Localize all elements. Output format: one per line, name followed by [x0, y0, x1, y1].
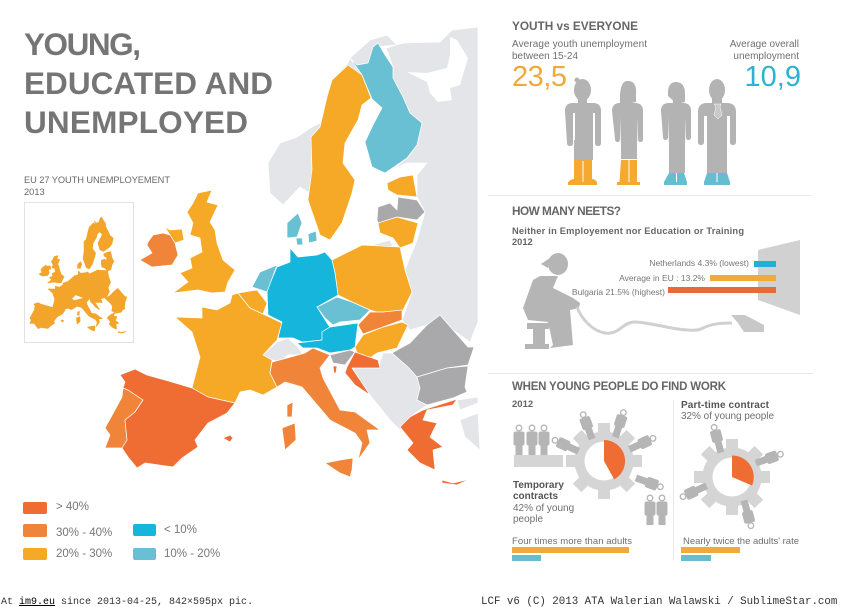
- figure: woman: [661, 82, 691, 185]
- youth stat: [512, 39, 647, 93]
- text: part-time contract: [681, 400, 774, 422]
- panel: when young people do find work: [512, 381, 799, 561]
- overall stat: [730, 39, 801, 93]
- legend: < 10%: [164, 524, 197, 536]
- text: temporary contracts: contracts: [513, 491, 558, 502]
- subtitle: EU 27 youth unemployment: EU 27 YOUTH UNEMPLOYEMENT: [24, 175, 170, 185]
- non-EU countries background: [263, 27, 480, 450]
- inset map: EU 27 overall: [24, 202, 134, 342]
- bars: four times more than adults: [512, 536, 632, 561]
- title: UNEMPLOYED: [24, 104, 248, 140]
- countries: 10-20 percent: [252, 43, 422, 325]
- legend: [23, 501, 220, 560]
- youth stat: 23,5: [512, 61, 567, 93]
- footer: image host caption: [1, 596, 837, 607]
- main map of Europe: [105, 27, 480, 485]
- legend: > 40%: [56, 501, 89, 513]
- projection screen: [758, 240, 800, 315]
- people on gear: part-time: [678, 423, 785, 530]
- title: YOUNG,: [24, 26, 141, 62]
- legend: 30% - 40%: [56, 527, 112, 539]
- bars: nearly twice the adults' rate: Nearly twice the adults' rate: [683, 536, 799, 547]
- figure: young man: [565, 78, 601, 185]
- text: temporary contracts: people: [513, 514, 543, 525]
- youth stat: between 15-24: [512, 51, 578, 62]
- bars: four times more than adults: Four times more than adults: [512, 536, 632, 547]
- heading: WHEN YOUNG PEOPLE DO FIND WORK: [512, 381, 727, 393]
- text: temporary contracts: 42% of young: [513, 503, 574, 514]
- bar chart: NEET rates: Netherlands 4.3% (lowest): [649, 258, 749, 268]
- overall stat: Average overall: [730, 39, 799, 50]
- overall stat: unemployment: [733, 51, 799, 62]
- legend: 10% - 20%: [164, 548, 220, 560]
- title: [24, 26, 273, 140]
- gear chart: temporary contracts 42 percent: [566, 423, 642, 499]
- bars: nearly twice the adults' rate: [681, 536, 799, 561]
- divider: [488, 373, 813, 374]
- bar chart: NEET rates: Bulgaria 21.5% (highest): [572, 287, 665, 297]
- subheading: [512, 226, 744, 247]
- bar chart: NEET rates: [572, 258, 776, 297]
- vertical divider line: [673, 400, 674, 560]
- gear chart: part-time contract 32 percent: [694, 439, 770, 515]
- people standing aside: [644, 495, 668, 525]
- white sea inlet: [407, 37, 468, 102]
- countries: 20-30 percent: [165, 65, 418, 403]
- figure: young woman: [612, 81, 643, 185]
- figure: man in suit: [698, 79, 736, 185]
- title: EDUCATED AND: [24, 65, 273, 101]
- cable and projector: [577, 307, 764, 333]
- heading: HOW MANY NEETS?: [512, 204, 621, 218]
- subtitle: EU 27 youth unemployment: [24, 175, 170, 197]
- countries: under 10 percent: [267, 248, 358, 353]
- legend: 20% - 30%: [56, 548, 112, 560]
- youth stat: Average youth unemployment: [512, 39, 647, 50]
- text: temporary contracts: [513, 480, 574, 525]
- heading: YOUTH vs EVERYONE: [512, 19, 638, 33]
- bar chart: NEET rates: Average in EU : 13.2%: [619, 273, 705, 283]
- countries: no data (grey): [330, 197, 474, 405]
- people waiting on platform: [514, 425, 563, 467]
- people on gear: temporary: [550, 408, 665, 493]
- subheading: 2012: [512, 237, 533, 247]
- text: part-time contract: Part-time contract: [681, 400, 770, 411]
- panel: how many NEETs: [512, 204, 800, 349]
- panel: youth vs everyone: [512, 19, 801, 185]
- text: temporary contracts: Temporary: [513, 480, 564, 491]
- countries: 30-40 percent: [105, 233, 402, 477]
- text: part-time contract: 32% of young people: [681, 411, 774, 422]
- countries: over 40 percent: [120, 352, 470, 485]
- subtitle: EU 27 youth unemployment: 2013: [24, 187, 45, 197]
- subheading: Neither in Employement nor Education or Training: [512, 226, 744, 236]
- year: 2012: [512, 399, 533, 410]
- divider: [488, 195, 811, 196]
- icon: seated person: [523, 253, 580, 349]
- overall stat: 10,9: [745, 61, 801, 93]
